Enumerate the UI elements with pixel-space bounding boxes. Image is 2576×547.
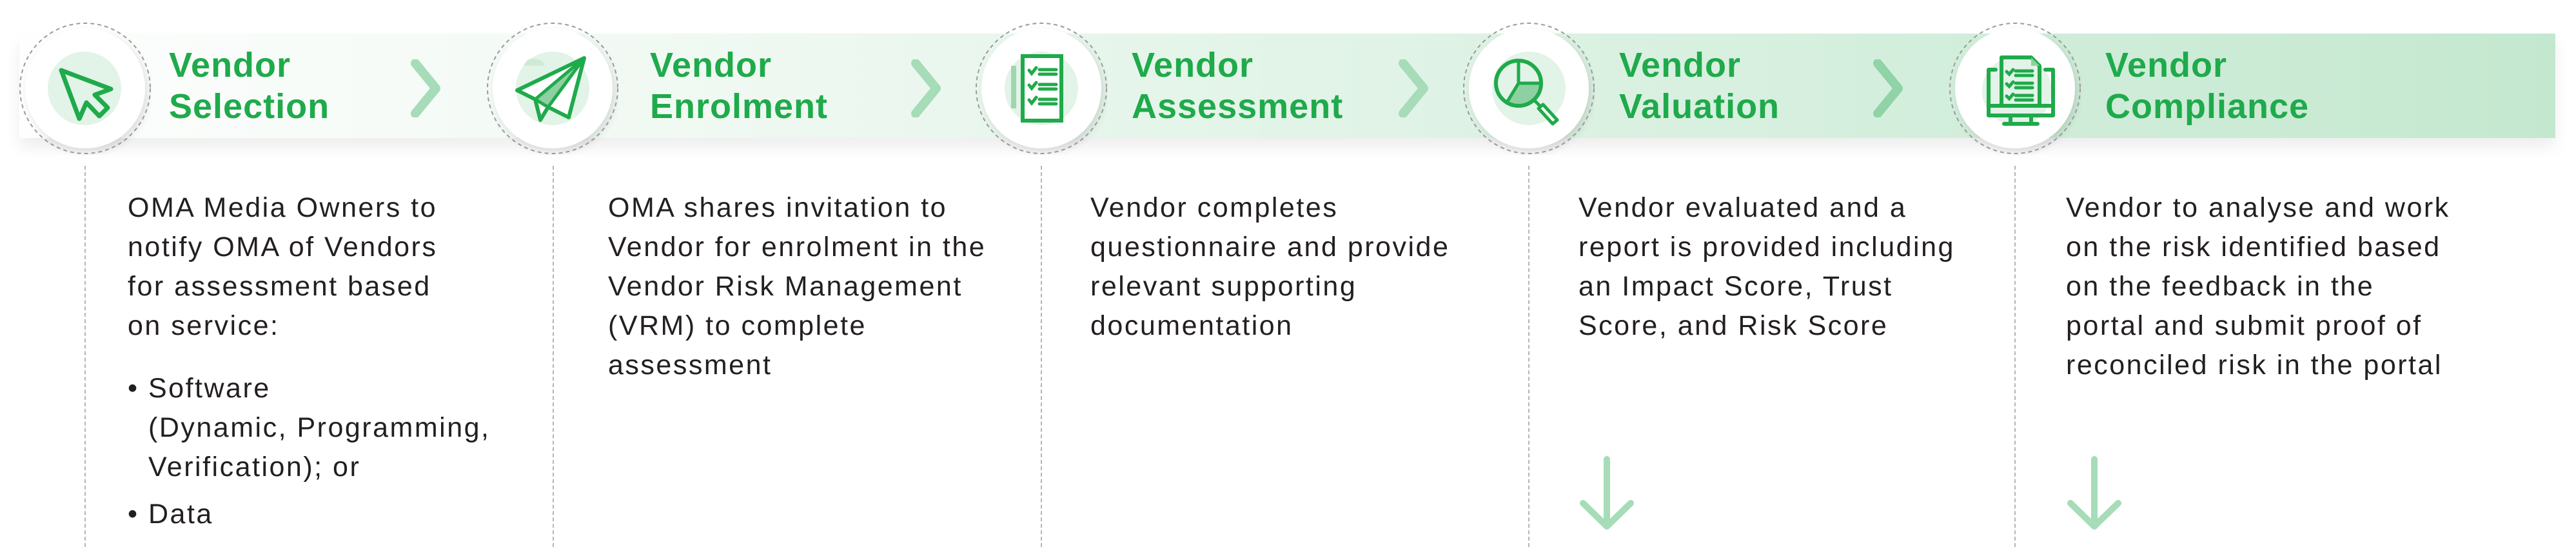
bullet list: (Dynamic, Programming, [148, 412, 490, 443]
title: Vendor Enrolment [650, 46, 828, 126]
title: Vendor Assessment: Assessment [1132, 87, 1343, 126]
chevron 1 [411, 59, 440, 117]
text: Vendor Compliance description: on the feedback in the [2066, 271, 2374, 302]
icon: magnifier pie chart (Vendor Valuation) [1463, 23, 1595, 155]
text: Vendor Assessment description: Vendor completes [1090, 192, 1338, 223]
text: Vendor Enrolment description: Vendor for enrolment in the [608, 232, 986, 263]
text: Vendor Enrolment description [608, 192, 986, 381]
icon: monitor with checklist (Vendor Compliance) [1949, 23, 2081, 155]
text: Vendor Compliance description: reconciled risk in the portal [2066, 350, 2443, 381]
text: Vendor Assessment description [1090, 192, 1450, 341]
title: Vendor Selection: Vendor [169, 46, 291, 85]
chevron 2 [911, 59, 941, 117]
text: Vendor Selection description [128, 192, 490, 530]
text: Vendor Selection description: on service: [128, 310, 279, 341]
text: Vendor Assessment description: relevant supporting [1090, 271, 1357, 302]
text: Vendor Valuation description: report is provided including [1578, 232, 1955, 263]
text: Vendor Compliance description [2066, 192, 2450, 381]
chevron 3 [1399, 59, 1428, 117]
title: Vendor Selection: Selection [169, 87, 329, 126]
title: Vendor Valuation: Vendor [1619, 46, 1741, 85]
text: Vendor Assessment description: documentation [1090, 310, 1293, 341]
title: Vendor Valuation: Valuation [1619, 87, 1780, 126]
title: Vendor Assessment: Vendor [1132, 46, 1254, 85]
text: Vendor Valuation description: Vendor evaluated and a [1578, 192, 1907, 223]
header band [19, 34, 2555, 138]
text: Vendor Selection description: notify OMA of Vendors [128, 232, 437, 263]
text: Vendor Assessment description: questionnaire and provide [1090, 232, 1450, 263]
text: Vendor Valuation description: an Impact Score, Trust [1578, 271, 1893, 302]
dashed divider lines [84, 166, 2016, 547]
title: Vendor Selection [169, 46, 329, 126]
text: Vendor Enrolment description: OMA shares invitation to [608, 192, 947, 223]
icon: paper plane (Vendor Enrolment) [487, 23, 618, 155]
bullet list: • Data [128, 499, 213, 530]
text: Vendor Selection description: OMA Media Owners to [128, 192, 437, 223]
title: Vendor Valuation [1619, 46, 1780, 126]
text: Vendor Compliance description: portal and submit proof of [2066, 310, 2423, 341]
icon: checklist (Vendor Assessment) [976, 23, 1107, 155]
bullet list: • Software [128, 373, 271, 404]
icon: cursor (Vendor Selection) [19, 23, 151, 155]
bullet list [128, 373, 490, 530]
arrow: down (Compliance) [2067, 456, 2121, 530]
text: Vendor Selection description: for assessment based [128, 271, 431, 302]
chevron 4 [1873, 59, 1903, 117]
title: Vendor Enrolment: Enrolment [650, 87, 828, 126]
title: Vendor Enrolment: Vendor [650, 46, 772, 85]
title: Vendor Compliance: Compliance [2105, 87, 2309, 126]
text: Vendor Enrolment description: assessment [608, 350, 772, 381]
text: Vendor Valuation description [1578, 192, 1955, 341]
text: Vendor Valuation description: Score, and Risk Score [1578, 310, 1888, 341]
text: Vendor Compliance description: Vendor to analyse and work [2066, 192, 2450, 223]
text: Vendor Enrolment description: Vendor Risk Management [608, 271, 963, 302]
title: Vendor Compliance: Vendor [2105, 46, 2227, 85]
text: Vendor Compliance description: on the risk identified based [2066, 232, 2441, 263]
title: Vendor Compliance [2105, 46, 2309, 126]
title: Vendor Assessment [1132, 46, 1343, 126]
arrow: down (Valuation) [1580, 456, 1634, 530]
bullet list: Verification); or [148, 452, 360, 482]
text: Vendor Enrolment description: (VRM) to complete [608, 310, 867, 341]
